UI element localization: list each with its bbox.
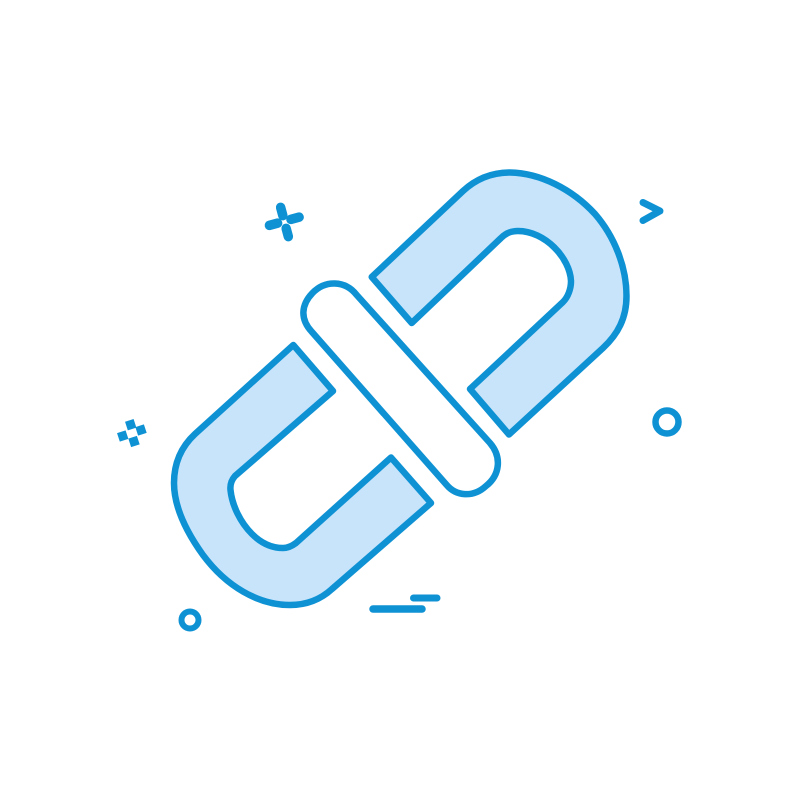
icon: lower chain link [174, 345, 431, 605]
icon: dashes [373, 598, 437, 609]
icon: bottom-left ring [182, 612, 198, 628]
icon: right ring [656, 410, 678, 434]
icon: chevron [643, 202, 660, 220]
icon: four-petal sparkle [264, 202, 305, 242]
icon: upper chain link [372, 172, 626, 434]
icon: small diamonds cluster [117, 419, 147, 447]
icon: central connector bar [303, 283, 498, 494]
